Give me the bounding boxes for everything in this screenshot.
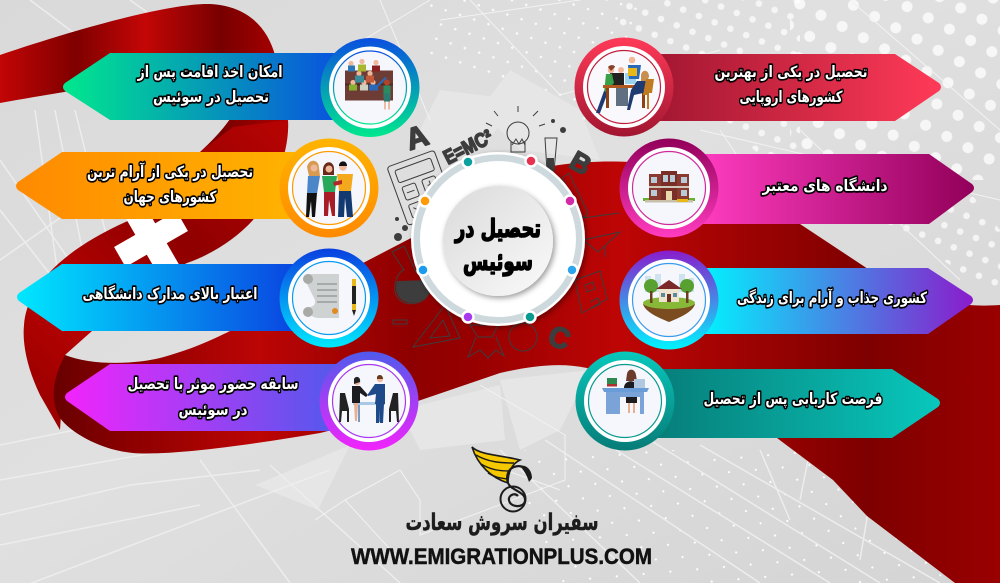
panel: job opportunities: [576, 352, 940, 450]
banner text: کشورهای اروپایی: [740, 88, 843, 107]
logo emblem: [472, 447, 532, 512]
panel: attractive country: [620, 250, 973, 350]
icon: university building: [620, 138, 718, 238]
icon: woman at desk: [576, 352, 674, 450]
center hub: [411, 152, 585, 326]
dark dots: [394, 119, 566, 241]
letter A: A: [402, 119, 432, 157]
banner: [650, 369, 940, 438]
icon: students at table: [574, 38, 674, 136]
panel: effective presence: [65, 352, 418, 450]
hub outer ring: [411, 152, 585, 326]
flask liquid: [396, 280, 431, 303]
icon: three students: [280, 138, 378, 238]
banner text: [714, 63, 868, 107]
hub title: [454, 214, 541, 277]
hub title: سوئیس: [463, 247, 533, 277]
test tube liquid: [547, 158, 554, 171]
banner text: تحصیل در یکی از بهترین: [714, 63, 868, 81]
banner text: فرصت کاریابی پس از تحصیل: [704, 390, 882, 409]
banner text: [137, 63, 282, 106]
panel: best european countries: [574, 38, 941, 136]
banner text: [128, 375, 298, 419]
banner: [63, 53, 345, 120]
icon: floating island house: [620, 250, 718, 350]
banner: [65, 364, 345, 431]
letter C: C: [544, 320, 574, 357]
website url: WWW.EMIGRATIONPLUS.COM: [351, 544, 652, 569]
banner text: اعتبار بالای مدارک دانشگاهی: [82, 284, 258, 303]
hub inner disc: [443, 186, 553, 296]
logo wordmark: سفیران سروش سعادت: [406, 510, 598, 536]
banner: [700, 268, 973, 334]
banner text: کشورهای جهان: [124, 188, 217, 206]
hub title: تحصیل در: [454, 214, 541, 243]
panel: reputable universities: [620, 138, 974, 238]
icon: lecture hall: [320, 38, 420, 137]
icon: business handshake: [320, 352, 418, 450]
banner text: تحصیل در یکی از آرام ترین: [87, 162, 253, 181]
banner text: دانشگاه های معتبر: [762, 176, 888, 195]
hub connector dots: [418, 156, 578, 322]
banner: [700, 154, 974, 224]
banner text: در سوئیس: [178, 401, 248, 419]
banner text: تحصیل در سوئیس: [153, 88, 269, 106]
swiss cross: [102, 190, 200, 288]
panel: credible degrees: [17, 248, 378, 348]
panel: peaceful country: [16, 138, 378, 238]
banner: [16, 152, 305, 219]
banner text: سابقه حضور موثر با تحصیل: [128, 375, 298, 393]
banner: [17, 264, 305, 331]
letter B: B: [565, 145, 596, 181]
banner: [650, 54, 941, 121]
icon: certificate and pen: [280, 248, 378, 348]
logo: [351, 447, 652, 569]
banner text: کشوری جذاب و آرام برای زندگی: [737, 288, 928, 307]
gray outlined doodles: [387, 106, 620, 358]
banner text: [87, 162, 253, 206]
formula E=MC2: E=MC²: [440, 126, 497, 169]
education doodles: [387, 106, 620, 358]
panel: residence after study: [63, 38, 420, 137]
banner text: امکان اخذ اقامت پس از: [137, 63, 282, 82]
